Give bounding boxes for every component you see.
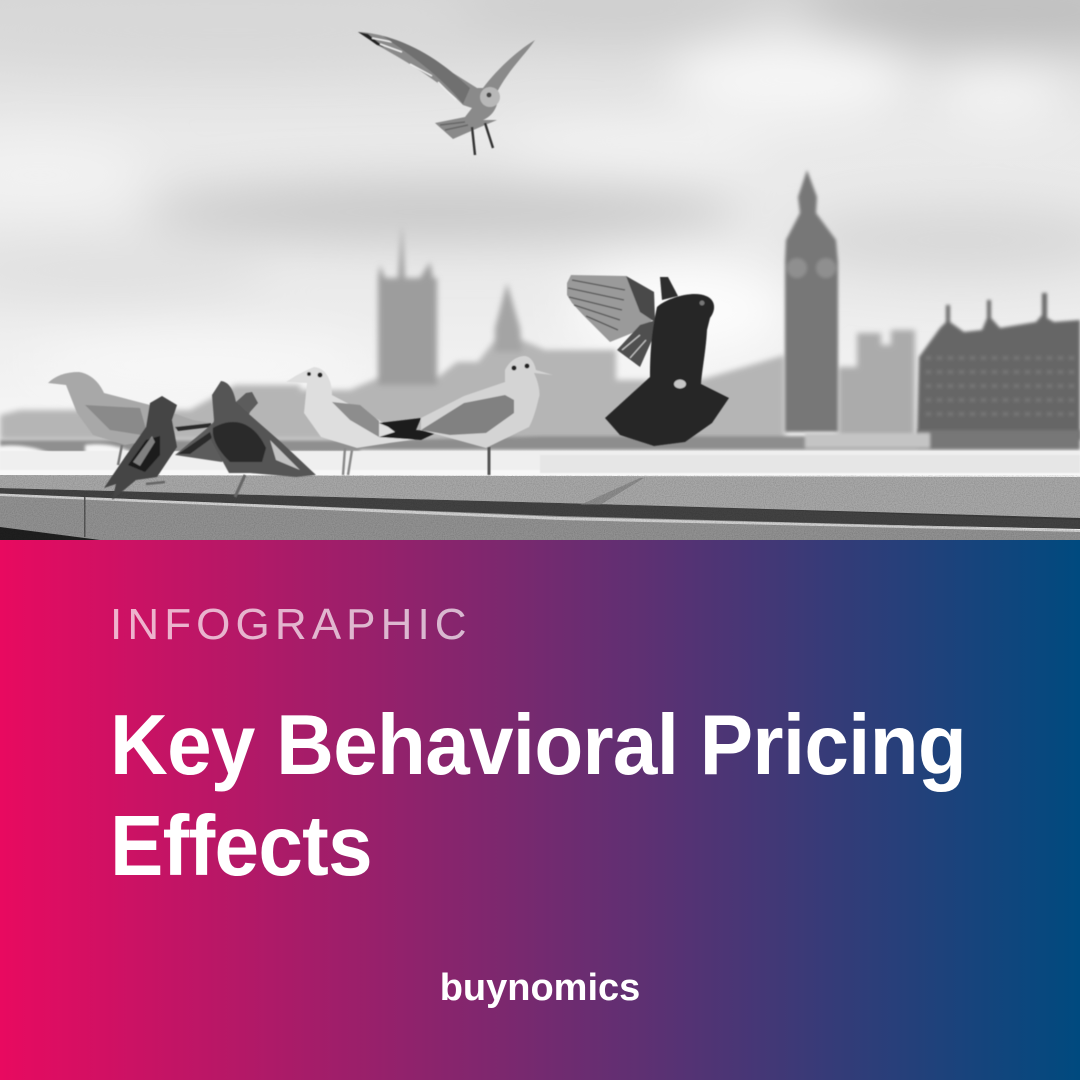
bird: white gull centre — [379, 356, 553, 475]
bird: white gull centre-left — [286, 367, 432, 475]
sky with clouds — [0, 0, 1080, 540]
skyline: bridge and far buildings — [0, 225, 915, 440]
title: Effects — [110, 797, 372, 892]
river — [0, 451, 1080, 477]
bird: gull in flight — [358, 32, 535, 155]
brand wordmark: buynomics — [440, 967, 640, 1009]
bridge arches — [0, 430, 1080, 470]
bird: dark pigeon taking off — [567, 275, 729, 446]
bird: big pigeon — [211, 381, 316, 497]
embankment wall — [0, 475, 1080, 540]
gradient band — [0, 540, 1080, 1080]
skyline: Big Ben and Portcullis House — [785, 170, 1080, 440]
eyebrow label: INFOGRAPHIC — [110, 600, 472, 649]
bird: brown gull far left — [48, 372, 211, 465]
title — [110, 697, 966, 892]
title: Key Behavioral Pricing — [110, 697, 966, 792]
photo: birds on the Thames embankment with Westminster skyline — [0, 0, 1080, 540]
bird: pigeon front left — [104, 396, 177, 500]
bird: back pigeon — [175, 392, 258, 462]
birds — [48, 32, 729, 500]
